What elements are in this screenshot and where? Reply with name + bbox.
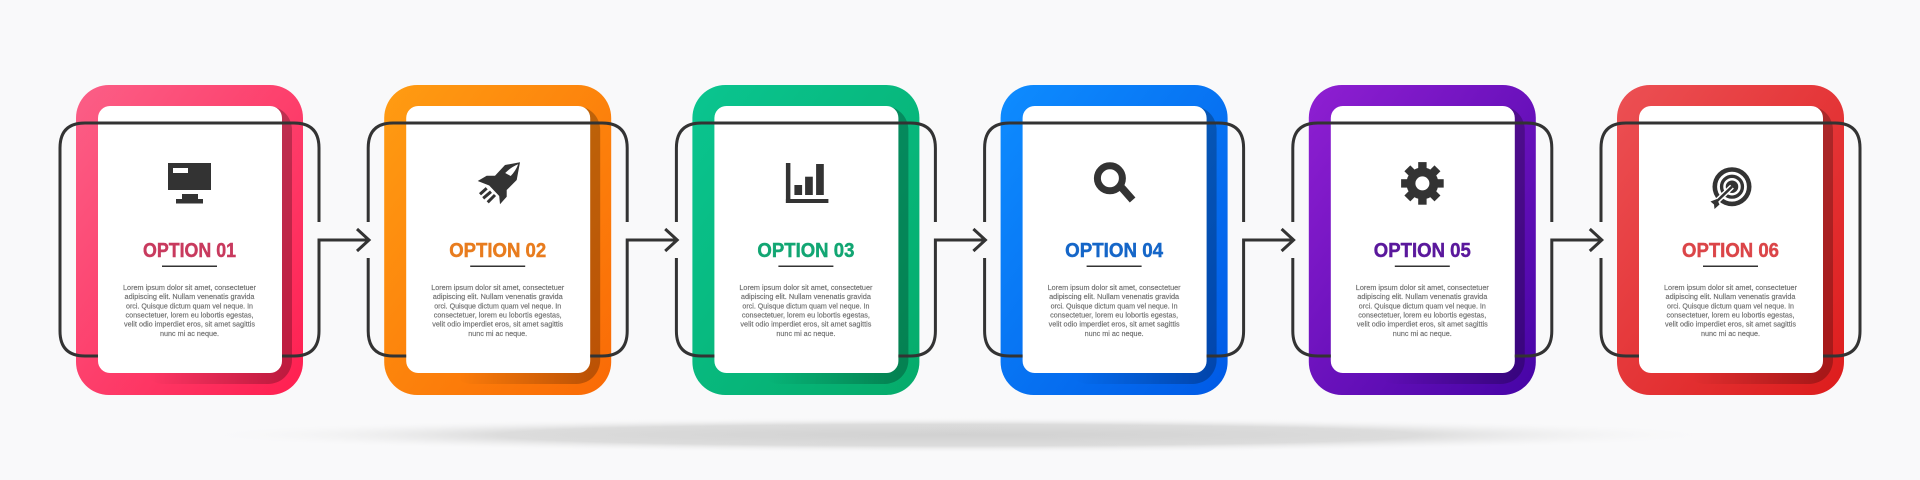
heading: OPTION 06 bbox=[1682, 240, 1779, 262]
body text: velit odio imperdiet eros, sit amet sagittis bbox=[432, 320, 563, 329]
body text: consectetuer, lorem eu lobortis egestas, bbox=[1050, 310, 1178, 320]
outline frame and arrow bbox=[985, 123, 1294, 356]
body text: adipiscing elit. Nullam venenatis gravida bbox=[1357, 292, 1488, 301]
icon: monitor bbox=[168, 163, 211, 204]
body text: orci. Quisque dictum quam vel neque. In bbox=[1667, 301, 1794, 310]
body text: velit odio imperdiet eros, sit amet sagittis bbox=[1357, 320, 1488, 329]
body text: velit odio imperdiet eros, sit amet sagittis bbox=[1665, 320, 1796, 329]
body text: Lorem ipsum dolor sit amet, consectetuer bbox=[1048, 283, 1181, 292]
body text: velit odio imperdiet eros, sit amet sagittis bbox=[740, 320, 872, 329]
body text bbox=[739, 283, 873, 338]
panel: option 04 bbox=[985, 85, 1294, 395]
body text: nunc mi ac neque. bbox=[776, 329, 835, 338]
body text: orci. Quisque dictum quam vel neque. In bbox=[1359, 301, 1486, 310]
panel: option 05 bbox=[1293, 85, 1602, 395]
divider bbox=[778, 266, 833, 267]
body text: adipiscing elit. Nullam venenatis gravida bbox=[1666, 292, 1796, 301]
body text: adipiscing elit. Nullam venenatis gravida bbox=[433, 292, 564, 301]
divider bbox=[1703, 266, 1758, 267]
body text: Lorem ipsum dolor sit amet, consectetuer bbox=[1664, 283, 1798, 292]
heading: OPTION 03 bbox=[757, 240, 854, 262]
icon: bar chart bbox=[786, 163, 828, 203]
icon: target bbox=[1710, 167, 1752, 209]
outline frame bbox=[1601, 123, 1860, 356]
body text bbox=[123, 283, 257, 338]
ground shadow bbox=[193, 417, 1723, 453]
outline frame and arrow bbox=[60, 123, 369, 356]
body text bbox=[431, 283, 565, 338]
body text: consectetuer, lorem eu lobortis egestas, bbox=[1358, 310, 1486, 320]
body text: adipiscing elit. Nullam venenatis gravida bbox=[741, 292, 872, 301]
outline frame and arrow bbox=[676, 123, 985, 356]
panel: option 03 bbox=[676, 85, 985, 395]
heading: OPTION 04 bbox=[1065, 240, 1164, 262]
body text: nunc mi ac neque. bbox=[1085, 329, 1144, 338]
body text: nunc mi ac neque. bbox=[468, 329, 527, 338]
divider bbox=[1395, 266, 1450, 267]
body text: nunc mi ac neque. bbox=[160, 329, 219, 338]
body text: consectetuer, lorem eu lobortis egestas, bbox=[742, 310, 870, 320]
body text bbox=[1048, 283, 1181, 338]
body text: orci. Quisque dictum quam vel neque. In bbox=[742, 301, 869, 310]
body text: nunc mi ac neque. bbox=[1701, 329, 1760, 338]
body text: consectetuer, lorem eu lobortis egestas, bbox=[126, 310, 254, 320]
body text: adipiscing elit. Nullam venenatis gravida bbox=[124, 292, 255, 301]
body text: Lorem ipsum dolor sit amet, consectetuer bbox=[739, 283, 873, 292]
divider bbox=[1087, 266, 1142, 267]
body text: nunc mi ac neque. bbox=[1393, 329, 1452, 338]
icon: gear bbox=[1401, 162, 1444, 205]
panel: option 01 bbox=[60, 85, 369, 395]
body text: orci. Quisque dictum quam vel neque. In bbox=[434, 301, 561, 310]
body text: velit odio imperdiet eros, sit amet sagittis bbox=[124, 320, 255, 329]
body text bbox=[1664, 283, 1798, 338]
panel: option 06 bbox=[1601, 85, 1860, 395]
body text: orci. Quisque dictum quam vel neque. In bbox=[1051, 301, 1178, 310]
heading: OPTION 05 bbox=[1374, 240, 1471, 262]
outline frame and arrow bbox=[1293, 123, 1602, 356]
body text: Lorem ipsum dolor sit amet, consectetuer bbox=[123, 283, 257, 292]
body text: Lorem ipsum dolor sit amet, consectetuer bbox=[1356, 283, 1489, 292]
body text: velit odio imperdiet eros, sit amet sagittis bbox=[1049, 320, 1180, 329]
divider bbox=[470, 266, 525, 267]
outline frame and arrow bbox=[368, 123, 677, 356]
body text: orci. Quisque dictum quam vel neque. In bbox=[126, 301, 253, 310]
heading: OPTION 01 bbox=[143, 240, 236, 262]
body text: consectetuer, lorem eu lobortis egestas, bbox=[1666, 310, 1794, 320]
icon: rocket bbox=[478, 162, 520, 204]
body text: Lorem ipsum dolor sit amet, consectetuer bbox=[431, 283, 565, 292]
body text: consectetuer, lorem eu lobortis egestas, bbox=[434, 310, 562, 320]
icon: magnifier bbox=[1097, 166, 1133, 200]
divider bbox=[162, 266, 217, 267]
body text bbox=[1356, 283, 1489, 338]
body text: adipiscing elit. Nullam venenatis gravida bbox=[1049, 292, 1180, 301]
heading: OPTION 02 bbox=[449, 240, 546, 262]
panel: option 02 bbox=[368, 85, 677, 395]
